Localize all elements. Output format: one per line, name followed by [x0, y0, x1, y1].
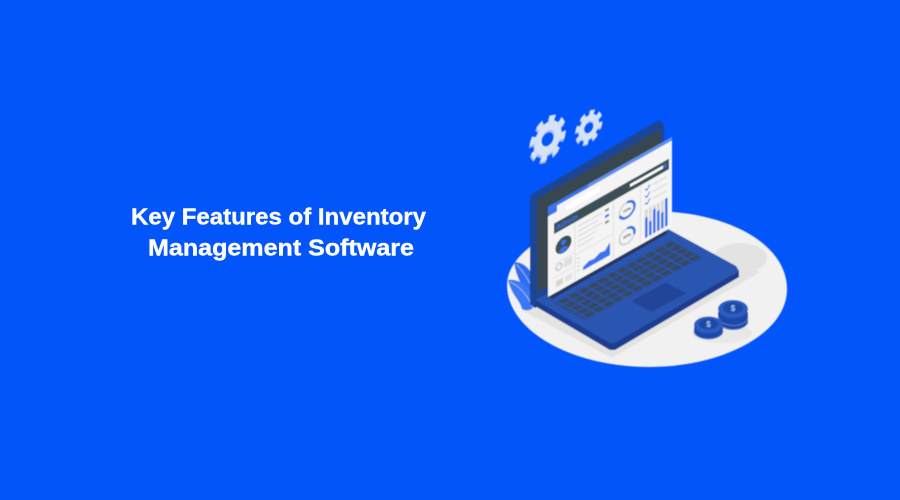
hinge	[546, 230, 668, 299]
platform ellipse	[507, 211, 787, 367]
list rows	[578, 208, 609, 247]
donut chart 30%	[620, 224, 634, 248]
laptop lid	[530, 121, 664, 308]
icon: plant leaves	[508, 262, 536, 310]
media widget	[556, 272, 572, 287]
donut chart 30%: 30%	[623, 231, 631, 241]
bar chart	[645, 197, 668, 238]
icon: coin stack right	[718, 300, 748, 330]
donut chart 70%	[620, 198, 634, 222]
icon: coin stack right: $	[731, 304, 736, 313]
admin header bar	[554, 159, 669, 234]
icon: large gear	[530, 112, 565, 167]
panel dividers	[554, 185, 641, 292]
title: Key Features of Inventory	[131, 204, 426, 230]
title: Management Software	[148, 234, 414, 260]
admin header bar: Admin	[556, 211, 578, 232]
title	[131, 204, 426, 260]
window title strip	[548, 137, 672, 221]
donut chart 70%: 70%	[623, 205, 631, 215]
browser window dashboard	[548, 137, 672, 297]
area chart	[577, 240, 610, 274]
laptop base	[535, 229, 739, 350]
icon: small gear	[576, 108, 601, 148]
illustration: laptop dashboard	[507, 108, 787, 367]
avatar	[556, 232, 572, 257]
icon: coin stack left: $	[706, 320, 711, 329]
keyboard	[553, 240, 727, 334]
trackpad	[631, 282, 686, 312]
checklist	[645, 175, 666, 205]
icon: settings gear widget	[556, 255, 572, 272]
ground shadows	[525, 243, 767, 358]
icon: coin stack left	[694, 316, 723, 339]
